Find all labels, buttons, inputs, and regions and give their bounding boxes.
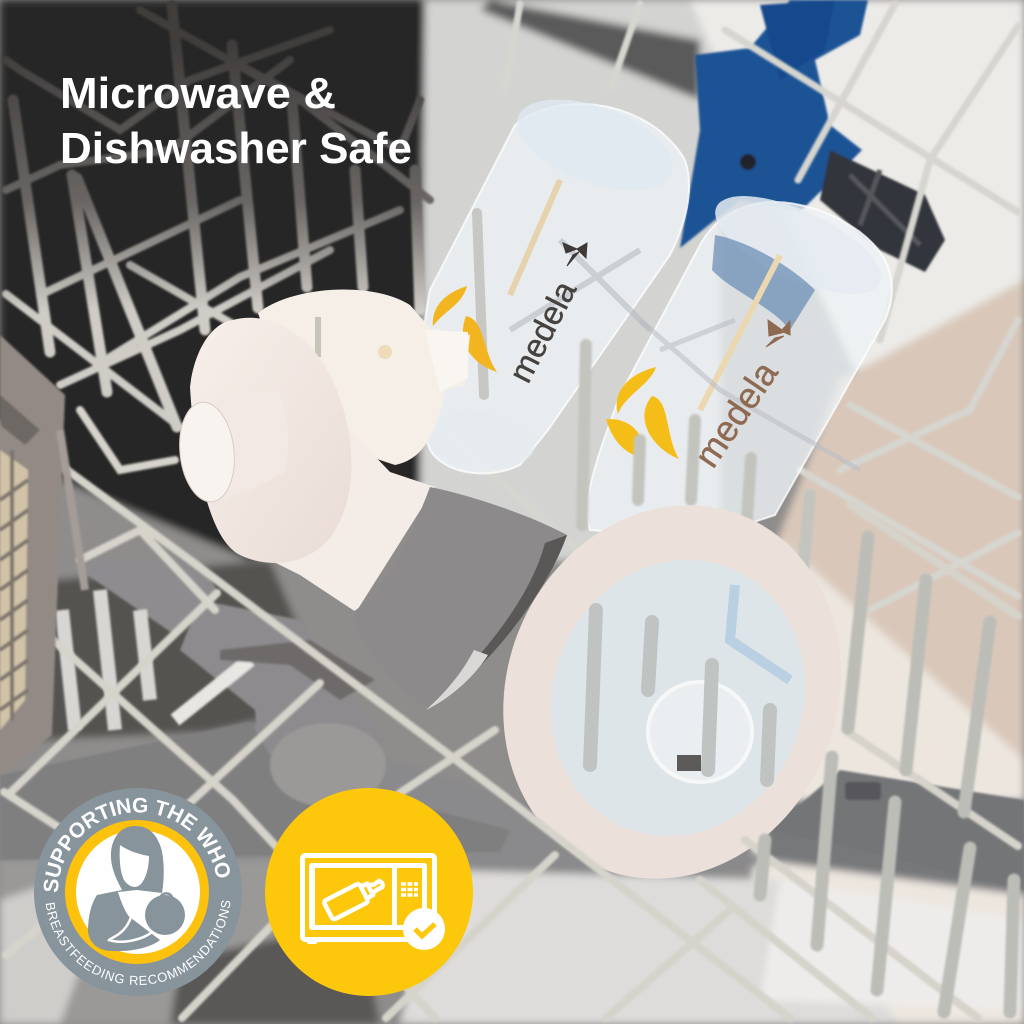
right tines [760,537,1014,1012]
bottle 1 [422,81,689,475]
pump neck [240,420,435,612]
middle tines [582,345,810,570]
back wire rack [6,6,430,440]
upper right wires [430,4,1018,610]
grey cup sleeve [353,487,567,710]
spray arm and hub [0,560,1024,890]
bottle 2 logo [606,320,790,474]
icon: check mark [403,908,445,950]
bottle 1 logo: medela [501,274,584,388]
icon: baby bottle [323,874,387,920]
bottle 2 logo: medela [686,353,786,474]
breast pump [175,289,567,710]
title: Dishwasher Safe [60,124,412,173]
silicone flange ring [448,454,896,930]
upper tines [13,6,420,427]
bottle 1 logo [433,243,587,388]
pump rear body [258,289,470,465]
icon: mother nursing baby [88,826,185,951]
cutlery basket [0,335,85,775]
badge: supporting the WHO: BREASTFEEDING RECOMMENDATIONS [46,900,230,986]
pump flange [190,318,351,563]
pump nozzle [205,391,288,502]
title: Microwave & [60,69,336,118]
badge: microwave icon [265,788,473,996]
badge: supporting the WHO [34,788,242,996]
front wire rack [4,410,1018,1018]
badge: supporting the WHO: SUPPORTING THE WHO [44,798,230,892]
blue rack clip [680,0,945,272]
bottle 2 [587,176,894,540]
microwave [302,856,434,944]
title [60,69,412,173]
